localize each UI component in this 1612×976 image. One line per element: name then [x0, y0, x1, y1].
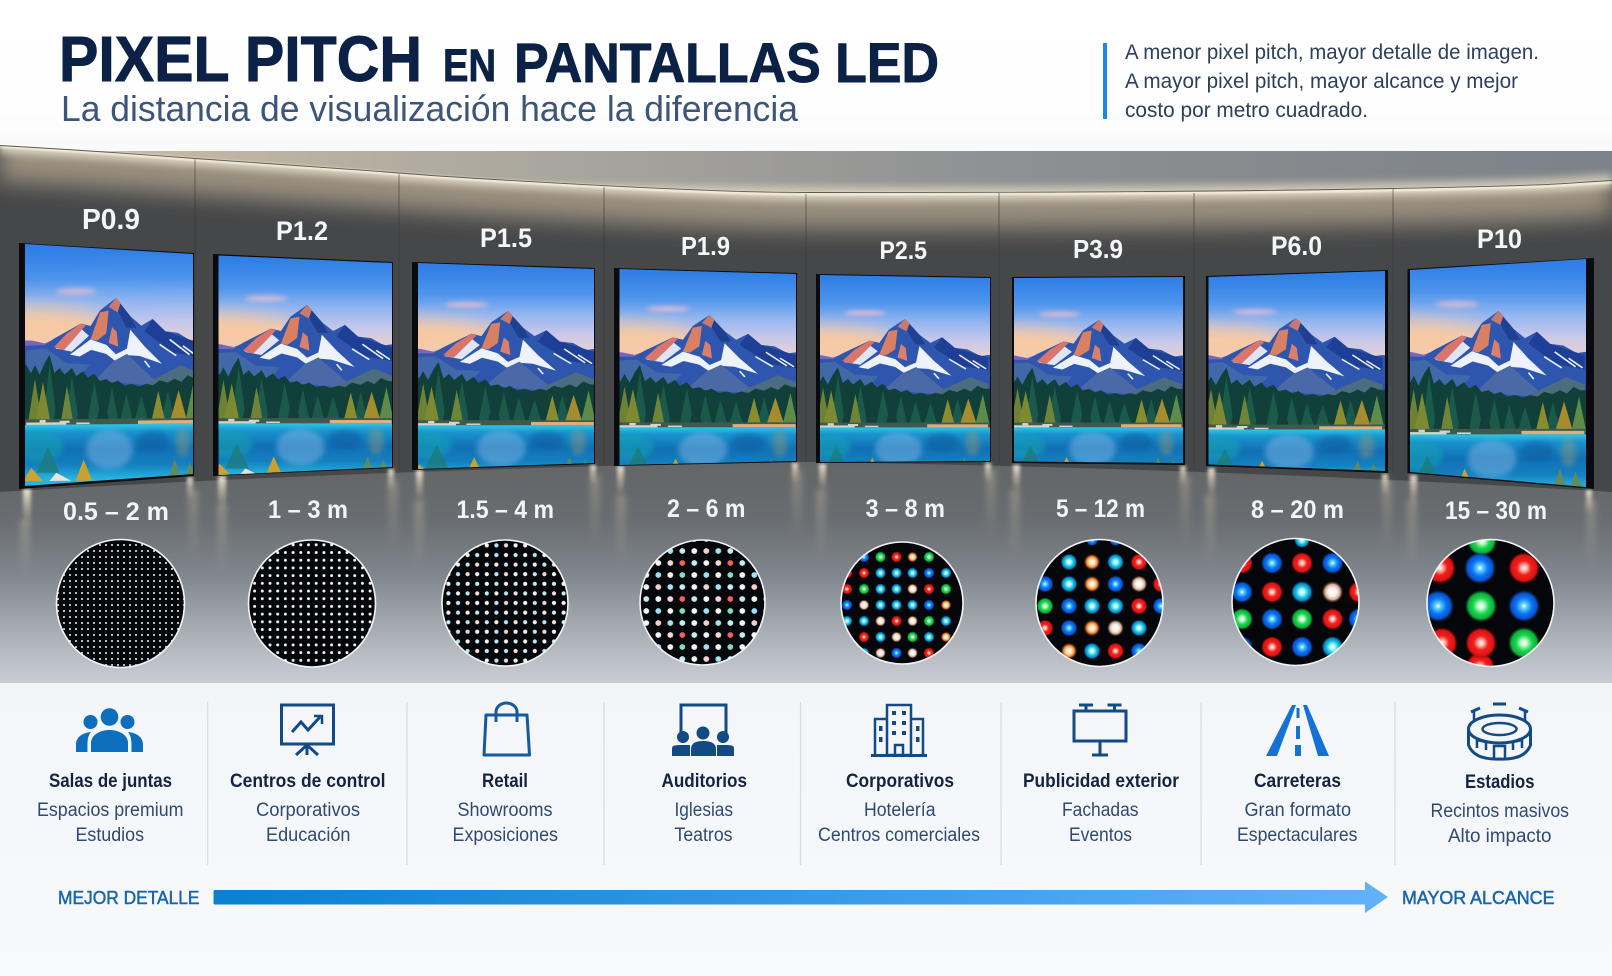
screen: P10 — [1408, 258, 1594, 489]
text: Retail — [452, 771, 558, 846]
text: Carreteras: Espectaculares — [1237, 825, 1358, 846]
text: Carreteras — [1237, 771, 1358, 846]
label: mayor alcance: MAYOR ALCANCE — [1402, 887, 1554, 908]
text: Publicidad exterior: Eventos — [1069, 825, 1132, 846]
callout: key message: A mayor pixel pitch, mayor alcance y mejor — [1125, 70, 1518, 93]
icon: road — [1266, 705, 1329, 756]
pitch labels: P1.5 — [480, 223, 532, 253]
icon: people meeting — [76, 708, 143, 752]
text: Centros de control: Centros de control — [230, 771, 386, 792]
LED detail: P1.5 — [442, 540, 568, 666]
LED detail: P2.5 — [841, 542, 963, 664]
screen: P6.0 — [1206, 270, 1388, 473]
text: Auditorios: Teatros — [674, 825, 732, 846]
pitch labels: P1.2 — [276, 216, 328, 246]
title — [59, 23, 939, 95]
text: Corporativos: Corporativos — [846, 771, 954, 792]
viewing distance labels: 1 – 3 m — [268, 496, 348, 524]
callout: key message — [1103, 41, 1539, 122]
text: Corporativos: Centros comerciales — [818, 825, 980, 846]
text: Carreteras: Carreteras — [1254, 771, 1341, 792]
viewing distance labels: 8 – 20 m — [1251, 496, 1344, 524]
text: Publicidad exterior: Fachadas — [1062, 800, 1138, 821]
pitch labels: P10 — [1477, 224, 1522, 254]
pitch labels: P1.9 — [681, 231, 730, 261]
panel: use cases background — [0, 683, 1612, 976]
text: Salas de juntas: Salas de juntas — [49, 771, 172, 792]
text: Salas de juntas: Estudios — [76, 825, 144, 846]
title: PANTALLAS LED — [514, 31, 939, 94]
panel: LED showroom scene — [0, 146, 1612, 683]
icon: buildings — [871, 705, 927, 756]
viewing distance labels: 1.5 – 4 m — [456, 496, 554, 524]
pitch labels: P2.5 — [880, 237, 927, 265]
text: Auditorios: Iglesias — [674, 800, 733, 821]
text: Auditorios: Auditorios — [662, 771, 747, 792]
LED detail: P6.0 — [1231, 538, 1360, 666]
icon: shopping bag — [484, 703, 530, 755]
screen: P0.9 — [19, 243, 194, 489]
screen: P3.9 — [1012, 276, 1185, 465]
header background — [0, 0, 1612, 160]
LED detail: P0.9 — [56, 540, 184, 668]
pitch labels: P0.9 — [82, 204, 140, 236]
pitch labels: P6.0 — [1271, 231, 1322, 261]
LED detail: P1.2 — [248, 540, 376, 667]
icon: presentation chart — [282, 705, 334, 755]
viewing distance labels: 0.5 – 2 m — [63, 498, 169, 526]
screen: P2.5 — [816, 274, 991, 463]
screen: P1.9 — [614, 268, 797, 466]
text: Retail: Retail — [482, 771, 528, 792]
text: Retail: Showrooms — [458, 800, 552, 821]
viewing distance labels — [63, 495, 1547, 526]
text: Centros de control — [230, 771, 386, 846]
icon: stadium — [1468, 704, 1530, 759]
text: Corporativos: Hotelería — [864, 800, 936, 821]
title: PIXEL PITCH — [59, 23, 422, 95]
callout: key message: costo por metro cuadrado. — [1125, 99, 1368, 122]
viewing distance labels: 5 – 12 m — [1056, 495, 1145, 523]
text: Centros de control: Educación — [266, 825, 350, 846]
subtitle: La distancia de visualización hace la diferencia — [61, 88, 799, 129]
viewing distance labels: 15 – 30 m — [1445, 497, 1547, 525]
LED detail: P10 — [1426, 538, 1555, 668]
text: Centros de control: Corporativos — [256, 800, 360, 821]
icon: auditorium — [672, 705, 734, 756]
text: Estadios — [1430, 772, 1569, 847]
text: Estadios: Alto impacto — [1448, 826, 1552, 847]
viewing distance labels: 2 – 6 m — [667, 495, 746, 523]
LED detail: P1.9 — [640, 540, 765, 665]
text: Estadios: Recintos masivos — [1430, 801, 1569, 822]
viewing distance labels: 3 – 8 m — [866, 495, 945, 523]
pitch labels: P3.9 — [1073, 234, 1123, 264]
text: Publicidad exterior — [1023, 771, 1180, 846]
text: Salas de juntas — [37, 771, 184, 846]
LED detail: P3.9 — [1036, 534, 1170, 666]
screen: P1.2 — [213, 254, 393, 476]
text: Auditorios — [662, 771, 747, 846]
icon: billboard — [1074, 705, 1126, 755]
title: EN — [443, 40, 496, 91]
text: Estadios: Estadios — [1465, 772, 1534, 793]
text: Carreteras: Gran formato — [1244, 800, 1351, 821]
pitch labels — [82, 204, 1522, 265]
label: mejor detalle: MEJOR DETALLE — [58, 887, 200, 908]
text: Salas de juntas: Espacios premium — [37, 800, 184, 821]
text: Corporativos — [818, 771, 980, 846]
callout: key message: A menor pixel pitch, mayor detalle de imagen. — [1125, 41, 1539, 64]
arrow: detail to reach scale — [214, 882, 1388, 913]
text: Retail: Exposiciones — [452, 825, 558, 846]
text: Publicidad exterior: Publicidad exterior — [1023, 771, 1180, 792]
screen: P1.5 — [412, 262, 595, 470]
